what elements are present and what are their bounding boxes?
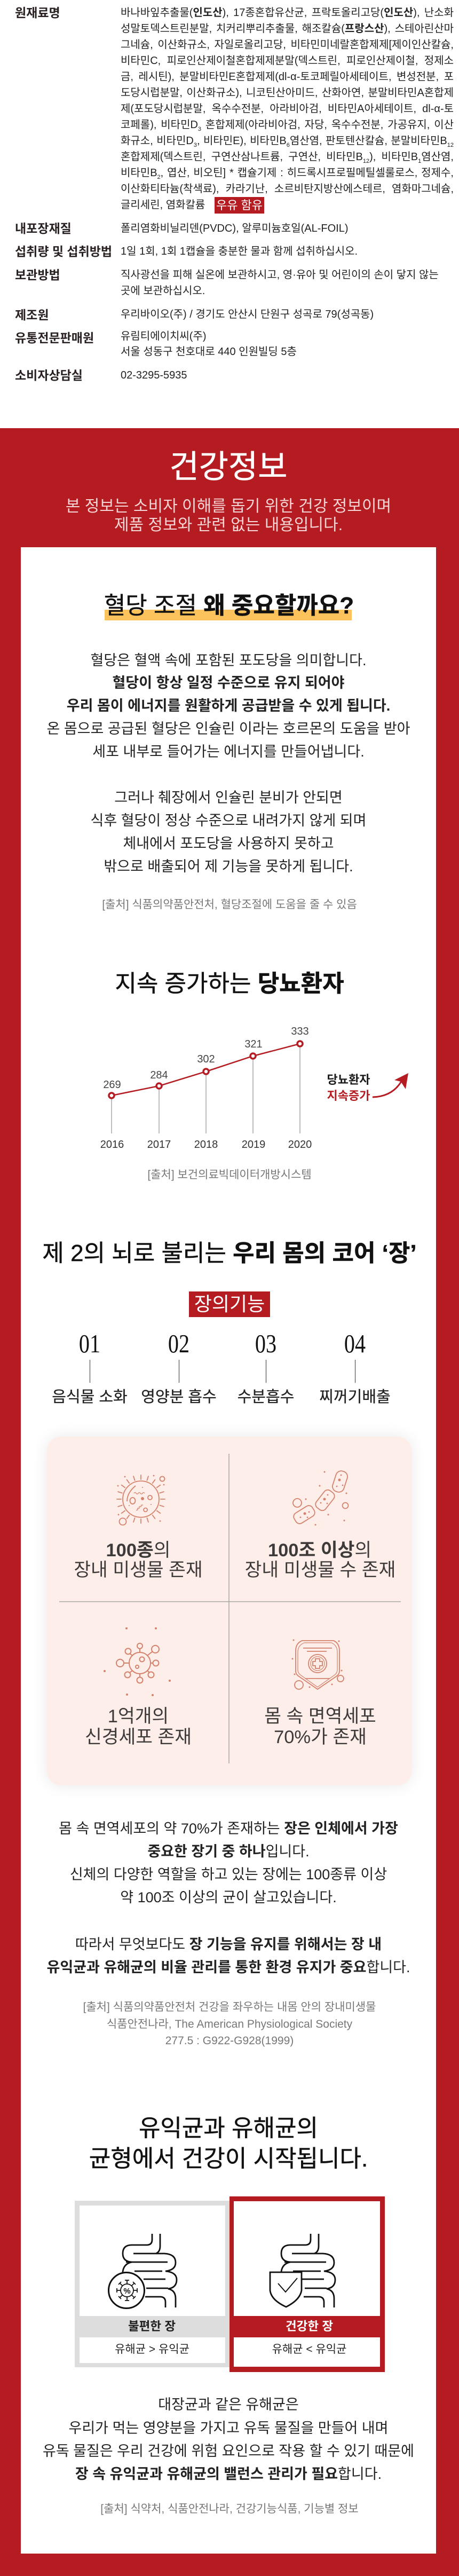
cell: 70 percent of immune cells: 70%가 존재 <box>274 1727 367 1747</box>
item: nutrient absorption <box>141 1329 217 1406</box>
badge: gut functions: 장의기능 <box>194 1293 265 1315</box>
line chart: diabetes patients 2016-2020: 302 <box>197 1053 215 1065</box>
text: ingredients list: 비타민C, 피로인산제이철혼합제제분말(덱스트린, 피로인산제이철, 정제소 <box>121 55 454 67</box>
text: ingredients list: 코페롤), 비타민D3 혼합제제(아라비아검, 자당, 옥수수전분, 가공유지, 이산 <box>121 119 454 132</box>
text block: harmful bacteria explanation: 장 속 유익균과 유해균의 밸런스 관리가 필요합니다. <box>75 2466 382 2482</box>
text block: immune cells in the gut: 중요한 장기 중 하나입니다. <box>147 1843 310 1859</box>
text: ingredients list: 도당시럽분말, 이산화규소), 니코틴산아미드, 산화아연, 분말비타민A혼합제 <box>121 87 454 99</box>
label: packaging material: 내포장재질 <box>15 222 72 235</box>
cell: 70 percent of immune cells <box>264 1639 376 1747</box>
icon: nerve cell <box>116 1643 159 1683</box>
list: four gut functions <box>52 1329 391 1406</box>
text block: immune cells in the gut: 몸 속 면역세포의 약 70%가 존재하는 장은 인체에서 가장 <box>59 1821 398 1837</box>
title: health information: 건강정보 <box>170 449 287 485</box>
source note: gut facts <box>83 2001 376 2047</box>
line chart: diabetes patients 2016-2020: 284 <box>150 1069 168 1081</box>
icon: intestine with virus: % <box>123 2287 131 2296</box>
text: ingredients list: 비타민B2, 엽산, 비오틴] * 캡슐기제 : 히드록시프로필메틸셀룰로스, 정제수, <box>121 167 454 180</box>
label: manufacturer: 제조원 <box>15 308 49 322</box>
panel: healthy gut <box>230 2196 385 2372</box>
source note: bacteria balance: [출처] 식약처, 식품안전나라, 건강기능식품, 기능별 정보 <box>100 2503 359 2515</box>
label: uncomfortable gut: 불편한 장 <box>128 2320 176 2333</box>
line chart: diabetes patients 2016-2020: 2016 <box>100 1139 124 1151</box>
icon: intestine with virus <box>108 2234 177 2309</box>
text: distributor <box>121 330 297 358</box>
text block: insulin secretion: 그러나 췌장에서 인슐린 분비가 안되면 <box>114 789 343 805</box>
item: water absorption: 03 <box>255 1329 276 1358</box>
text: distributor: 서울 성동구 천호대로 440 인원빌딩 5층 <box>121 346 297 358</box>
source note: chart: [출처] 보건의료빅데이터개방시스템 <box>147 1169 312 1181</box>
line chart: diabetes patients 2016-2020: 2019 <box>242 1139 265 1151</box>
item: waste excretion: 04 <box>344 1329 366 1358</box>
heading: balance of good and bad bacteria: 유익균과 유해균의 <box>139 2115 318 2141</box>
text: distributor: 유림티에이치씨(주) <box>121 330 207 342</box>
heading: balance of good and bad bacteria: 균형에서 건강이 시작됩니다. <box>89 2145 368 2172</box>
text block: blood sugar explanation: 우리 몸이 에너지를 원활하게 공급받을 수 있게 됩니다. <box>67 698 390 714</box>
text: packaging material: 폴리염화비닐리덴(PVDC), 알루미늄호일(AL-FOIL) <box>121 223 348 234</box>
label: ingredients: 원재료명 <box>15 6 60 20</box>
cell: 100 million nerve cells: 1억개의 <box>108 1706 169 1727</box>
panel: product information table <box>0 0 459 428</box>
cell: 100 trillion microbes: 장내 미생물 수 존재 <box>245 1560 395 1580</box>
cell: 100 trillion microbes: 100조 이상의 <box>268 1540 371 1561</box>
icon: bacteria capsules <box>292 1470 349 1525</box>
cell: 100 species of microbes: 100종의 <box>106 1540 171 1561</box>
line chart: diabetes patients 2016-2020: 2020 <box>288 1139 312 1151</box>
panel: gut facts card <box>47 1437 411 1785</box>
icon: intestine with shield <box>269 2234 336 2307</box>
text: ingredients list: 그네슘, 이산화규소, 자일로올리고당, 비타민미네랄혼합제제[제이인산칼슘, <box>121 39 454 51</box>
text: ingredients list <box>121 7 454 211</box>
item: water absorption <box>238 1329 294 1406</box>
text: storage: 직사광선을 피해 실온에 보관하시고, 영·유아 및 어린이의 손이 닿지 않는 <box>121 269 439 281</box>
cell: 100 trillion microbes <box>245 1470 395 1580</box>
item: nutrient absorption: 02 <box>168 1329 189 1358</box>
line chart: diabetes patients 2016-2020 <box>100 1026 408 1151</box>
line chart: diabetes patients 2016-2020: 269 <box>103 1079 121 1091</box>
text: consumer line: 02-3295-5935 <box>121 369 187 381</box>
line chart: diabetes patients 2016-2020: 2018 <box>194 1139 218 1151</box>
panel: white content sheet <box>21 547 436 2554</box>
item: digestion <box>52 1329 128 1406</box>
text: ingredients list: 글리세린, 염화칼륨 <box>121 199 205 211</box>
heading: balance of good and bad bacteria <box>89 2115 368 2172</box>
subtitle: disclaimer: 본 정보는 소비자 이해를 돕기 위한 건강 정보이며 <box>66 498 391 515</box>
text block: managing gut bacteria ratio: 따라서 무엇보다도 장 기능을 유지를 위해서는 장 내 <box>75 1936 382 1952</box>
text: ingredients list: 이산화티타늄(착색료), 카라기난, 소르비탄지방산에스테르, 염화마그네슘, <box>121 183 454 195</box>
text block: harmful bacteria explanation: 대장균과 같은 유해균은 <box>158 2397 299 2413</box>
line chart: diabetes patients 2016-2020: 2017 <box>147 1139 171 1151</box>
text block: immune cells in the gut: 신체의 다양한 역할을 하고 있는 장에는 100종류 이상 <box>70 1866 387 1882</box>
text: ingredients list: 성말토덱스트린분말, 치커리뿌리추출물, 해조칼슘(프랑스산), 스테아린산마 <box>121 23 454 35</box>
heading: growing diabetes patients: 지속 증가하는 당뇨환자 <box>115 971 344 997</box>
text block: blood sugar explanation: 혈당은 혈액 속에 포함된 포도당을 의미합니다. <box>91 652 366 668</box>
text block: managing gut bacteria ratio <box>46 1936 410 1975</box>
label: distributor: 유통전문판매원 <box>15 331 94 345</box>
text block: immune cells in the gut <box>59 1821 398 1905</box>
text: intake method: 1일 1회, 1회 1캡슐을 충분한 물과 함께 섭취하십시오. <box>121 246 358 257</box>
cell: 100 million nerve cells <box>85 1627 192 1747</box>
callout: diabetes patients keep increasing: 지속증가 <box>327 1089 370 1102</box>
cell: 70 percent of immune cells: 몸 속 면역세포 <box>264 1706 376 1727</box>
item: nutrient absorption: 영양분 흡수 <box>141 1389 217 1406</box>
source note: gut facts: 식품안전나라, The American Physiological Society <box>107 2018 352 2030</box>
text: manufacturer: 우리바이오(주) / 경기도 안산시 단원구 성곡로 79(성곡동) <box>121 309 374 320</box>
item: water absorption: 수분흡수 <box>238 1389 294 1406</box>
item: waste excretion: 찌꺼기배출 <box>319 1389 391 1406</box>
line chart: diabetes patients 2016-2020: 333 <box>291 1026 309 1037</box>
source note: gut facts: 277.5 : G922-G928(1999) <box>165 2035 294 2047</box>
icon: microbe <box>117 1475 165 1525</box>
line chart: diabetes patients 2016-2020: 321 <box>244 1038 263 1050</box>
text: ingredients list: 혼합제제(덱스트린, 구연산삼나트륨, 구연산, 비타민B12), 비타민B1염산염, <box>121 151 454 164</box>
source note: gut facts: [출처] 식품의약품안전처 건강을 좌우하는 내몸 안의 장내미생물 <box>83 2001 376 2013</box>
callout: diabetes patients keep increasing: 당뇨환자 <box>327 1073 370 1086</box>
text: ingredients list: 제(포도당시럽분말, 옥수수전분, 아라비아검, 비타민A아세테이트, dl-α-토 <box>121 103 454 115</box>
text: ingredients list: 금, 레시틴), 분말비타민E혼합제제(dl-α-토코페릴아세테이트, 변성전분, 포 <box>121 71 454 83</box>
text block: harmful bacteria explanation: 우리가 먹는 영양분을 가지고 유독 물질을 만들어 내며 <box>68 2420 389 2436</box>
source note: blood sugar: [출처] 식품의약품안전처, 혈당조절에 도움을 줄 수 있음 <box>102 899 357 911</box>
text block: blood sugar explanation: 온 몸으로 공급된 혈당은 인슐린 이라는 호르몬의 도움을 받아 <box>46 721 410 737</box>
heading: why blood sugar matters: 혈당 조절 왜 중요할까요? <box>104 593 354 619</box>
text: ingredients list: 바나바잎추출물(인도산), 17종혼합유산균, 프락토올리고당(인도산), 난소화 <box>121 7 454 19</box>
text block: blood sugar explanation <box>46 652 410 760</box>
text block: insulin secretion <box>91 789 366 875</box>
badge: contains milk: 우유 함유 <box>216 199 263 212</box>
text: ingredients list: 화규소, 비타민D3, 비타민E), 비타민B6염산염, 판토텐산칼슘, 분말비타민B12 <box>121 135 454 148</box>
cell: 100 species of microbes <box>74 1475 203 1580</box>
panel: uncomfortable gut <box>75 2201 230 2367</box>
text block: blood sugar explanation: 세포 내부로 들어가는 에너지를 만들어냅니다. <box>92 744 365 760</box>
item: digestion: 음식물 소화 <box>52 1389 128 1406</box>
cell: 100 million nerve cells: 신경세포 존재 <box>85 1727 192 1747</box>
text block: harmful bacteria explanation <box>43 2397 414 2482</box>
label: healthy gut: 건강한 장 <box>286 2320 333 2333</box>
text block: managing gut bacteria ratio: 유익균과 유해균의 비율 관리를 통한 환경 유지가 중요합니다. <box>46 1959 410 1975</box>
icon: medical shield <box>295 1641 344 1689</box>
text block: harmful bacteria explanation: 유독 물질은 우리 건강에 위험 요인으로 작용 할 수 있기 때문에 <box>43 2443 414 2459</box>
label: storage: 보관방법 <box>15 268 60 282</box>
item: waste excretion <box>319 1329 391 1406</box>
text block: blood sugar explanation: 혈당이 항상 일정 수준으로 유지 되어야 <box>113 675 344 691</box>
text: good bacteria more than bad bacteria: 유해균 < 유익균 <box>272 2343 346 2356</box>
text block: insulin secretion: 밖으로 배출되어 제 기능을 못하게 됩니다. <box>104 858 353 875</box>
label: consumer line: 소비자상담실 <box>15 368 83 382</box>
text: bad bacteria more than good bacteria: 유해균 > 유익균 <box>115 2343 189 2356</box>
subtitle: disclaimer <box>66 498 391 534</box>
heading: gut the core of the body: 제 2의 뇌로 불리는 우리 몸의 코어 ‘장’ <box>42 1240 417 1266</box>
item: digestion: 01 <box>79 1329 100 1358</box>
text block: insulin secretion: 식후 혈당이 정상 수준으로 내려가지 않게 되며 <box>91 813 366 829</box>
text: storage: 곳에 보관하십시오. <box>121 285 205 297</box>
text block: insulin secretion: 체내에서 포도당을 사용하지 못하고 <box>123 835 334 851</box>
subtitle: disclaimer: 제품 정보와 관련 없는 내용입니다. <box>114 516 343 534</box>
cell: 100 species of microbes: 장내 미생물 존재 <box>74 1560 203 1580</box>
label: intake method: 섭취량 및 섭취방법 <box>15 245 112 258</box>
text block: immune cells in the gut: 약 100조 이상의 균이 살고있습니다. <box>120 1889 337 1905</box>
callout: diabetes patients keep increasing <box>327 1073 408 1102</box>
text: storage <box>121 269 439 297</box>
